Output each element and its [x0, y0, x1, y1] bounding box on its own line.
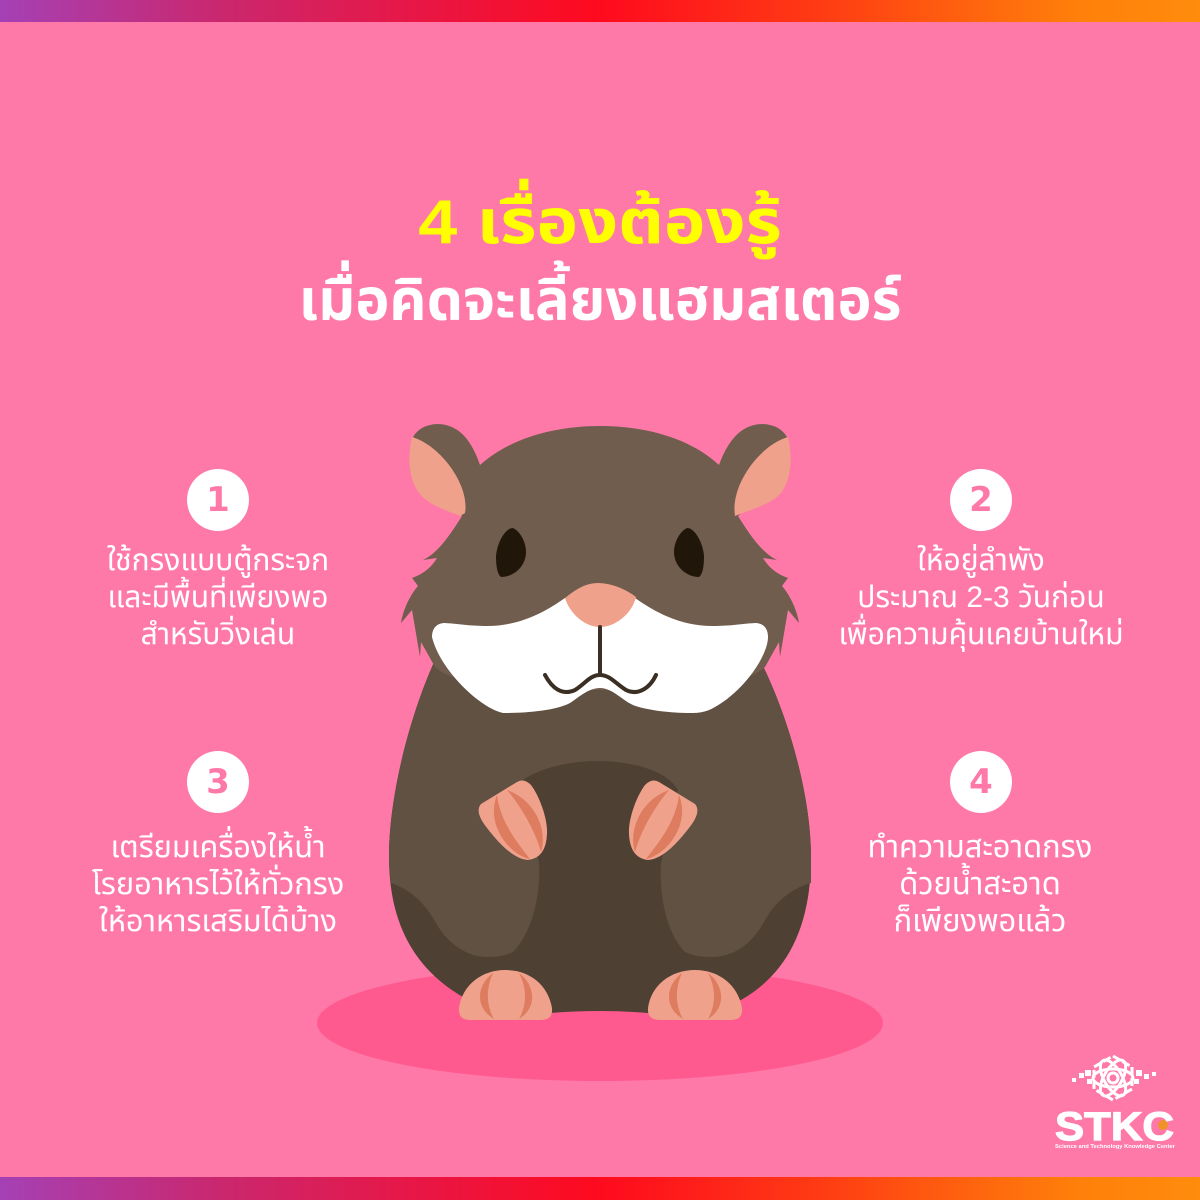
logo pixel dots	[1072, 1070, 1156, 1084]
point 1 text: และมีพื้นที่เพียงพอ	[107, 581, 329, 614]
left paw	[479, 781, 547, 860]
number badge 1	[187, 469, 249, 531]
number badge 1: 1	[206, 480, 230, 520]
number badge 2	[950, 469, 1012, 531]
number badge 3: 3	[206, 762, 230, 802]
point 4 text: ทำความสะอาดกรง	[868, 829, 1092, 864]
logo dot	[1158, 1120, 1168, 1130]
point 4 text: ก็เพียงพอแล้ว	[894, 903, 1066, 938]
title	[299, 178, 901, 333]
white muzzle	[432, 598, 768, 713]
right eye	[674, 528, 704, 577]
point 1 text: ใช้กรงแบบตู้กระจก	[107, 544, 329, 577]
right paw	[629, 781, 697, 860]
head with ears and fur	[401, 424, 799, 690]
point 4 text	[868, 829, 1092, 938]
point 1 text: สำหรับวิ่งเล่น	[141, 618, 295, 651]
left foot	[459, 970, 552, 1020]
point 4 text: ด้วยน้ำสะอาด	[899, 866, 1061, 901]
top gradient bar	[0, 0, 1200, 22]
point 1 text	[107, 544, 329, 651]
ground shadow	[317, 965, 883, 1081]
point 2 text: ประมาณ 2-3 วันก่อน	[857, 581, 1105, 614]
point 3 text: เตรียมเครื่องให้น้ำ	[110, 829, 326, 864]
logo wordmark: STKC	[1055, 1105, 1174, 1149]
mouth	[545, 627, 656, 692]
left inner ear	[409, 437, 466, 516]
number badge 3	[187, 751, 249, 813]
logo icon: atom	[1093, 1056, 1133, 1100]
right foot	[648, 970, 742, 1020]
logo tagline: Science and Technology Knowledge Center	[1055, 1144, 1176, 1150]
number badge 4	[950, 751, 1012, 813]
point 3 text	[92, 826, 344, 938]
point 2 text	[838, 544, 1124, 652]
point 2 text: ให้อยู่ลำพัง	[917, 544, 1045, 577]
number badge 4: 4	[969, 762, 993, 802]
hamster body	[389, 660, 811, 1013]
title line 2: เมื่อคิดจะเลี้ยงแฮมสเตอร์	[299, 269, 901, 333]
bottom gradient bar	[0, 1177, 1200, 1200]
number badge 2: 2	[969, 480, 993, 520]
right inner ear	[734, 437, 791, 516]
title line 1: 4 เรื่องต้องรู้	[418, 188, 782, 257]
point 3 text: โรยอาหารไว้ให้ทั่วกรง	[92, 866, 344, 901]
point 2 text: เพื่อความคุ้นเคยบ้านใหม่	[838, 618, 1124, 651]
left eye	[496, 528, 526, 577]
point 3 text: ให้อาหารเสริมได้บ้าง	[99, 903, 337, 938]
nose	[565, 583, 636, 627]
